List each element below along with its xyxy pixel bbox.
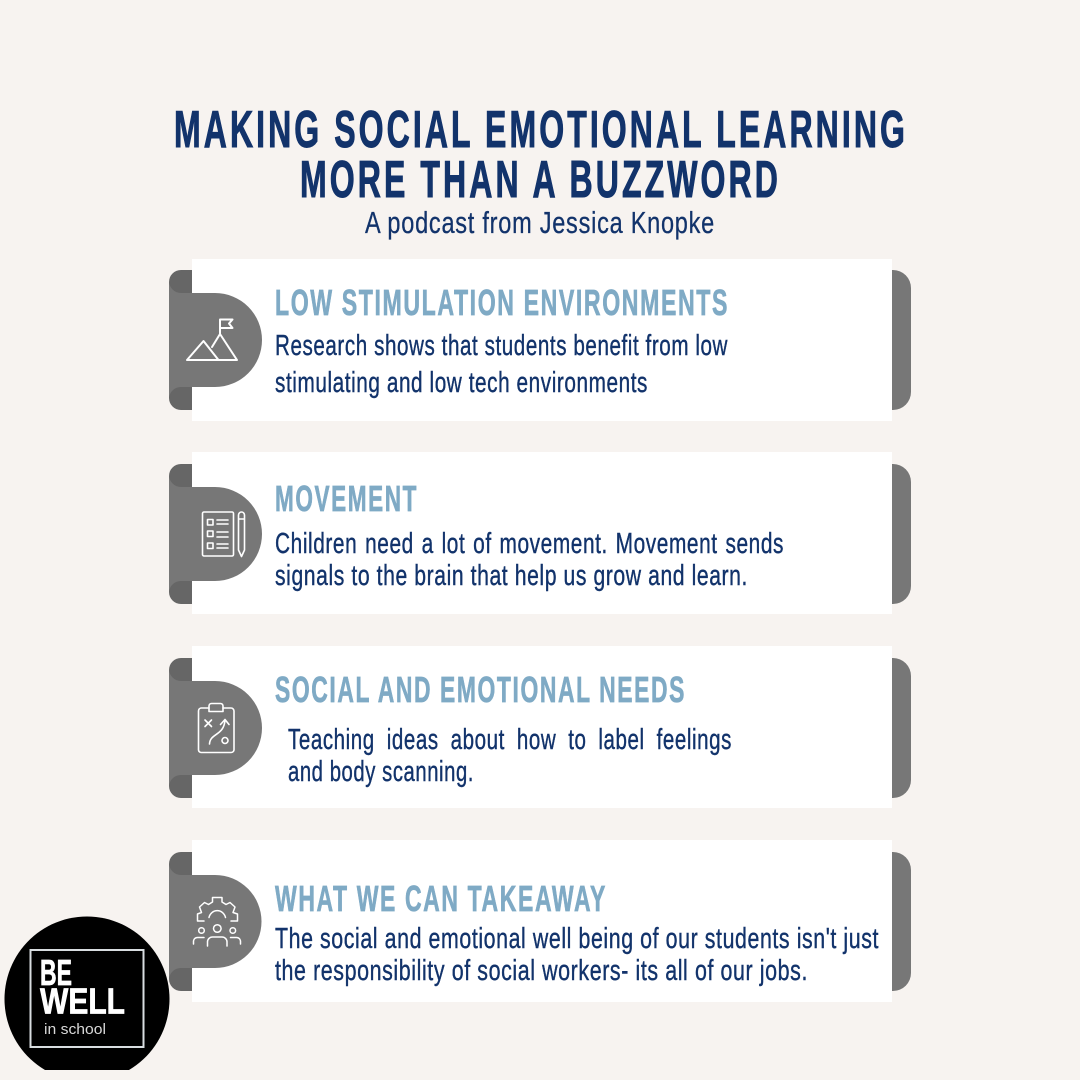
body text: Research shows that students benefit from low <box>275 330 728 362</box>
icon: checklist and pencil <box>202 512 244 556</box>
panel: what we can takeaway <box>169 840 911 1002</box>
body text: the responsibility of social workers- its all of our jobs. <box>275 955 808 987</box>
body text <box>275 330 728 399</box>
logo: be well in school <box>4 916 169 1070</box>
body text: The social and emotional well being of our students isn't just <box>275 923 879 955</box>
ribbon with icon badge <box>169 270 262 410</box>
logo: be well in school: BE <box>40 952 72 993</box>
logo: be well in school: in school <box>44 1022 106 1038</box>
ribbon with icon badge <box>169 464 262 604</box>
heading: MOVEMENT <box>275 478 418 519</box>
title: MORE THAN A BUZZWORD <box>300 151 781 209</box>
right tab <box>892 658 911 798</box>
heading: LOW STIMULATION ENVIRONMENTS <box>275 282 729 323</box>
title <box>174 101 908 209</box>
body text: and body scanning. <box>288 756 474 788</box>
panel: movement <box>169 452 911 614</box>
icon: mountain with flag <box>187 320 237 360</box>
body text: stimulating and low tech environments <box>275 367 648 399</box>
ribbon with icon badge <box>169 852 262 991</box>
heading: SOCIAL AND EMOTIONAL NEEDS <box>275 669 686 710</box>
icon: gear and people <box>194 898 240 946</box>
body text: signals to the brain that help us grow and learn. <box>275 560 748 592</box>
body text <box>288 724 732 788</box>
body text <box>275 528 784 592</box>
icon: clipboard with play diagram <box>198 704 234 753</box>
heading: WHAT WE CAN TAKEAWAY <box>275 878 607 919</box>
panel: low stimulation environments <box>169 259 911 421</box>
body text <box>275 923 879 987</box>
logo: be well in school: WELL <box>40 980 125 1022</box>
right tab <box>892 464 911 604</box>
body text: Teaching ideas about how to label feelings <box>288 724 732 756</box>
right tab <box>892 852 911 991</box>
ribbon with icon badge <box>169 658 262 798</box>
body text: Children need a lot of movement. Movement sends <box>275 528 784 560</box>
right tab <box>892 270 911 410</box>
panel: social and emotional needs <box>169 646 911 808</box>
subtitle: A podcast from Jessica Knopke <box>365 205 715 240</box>
